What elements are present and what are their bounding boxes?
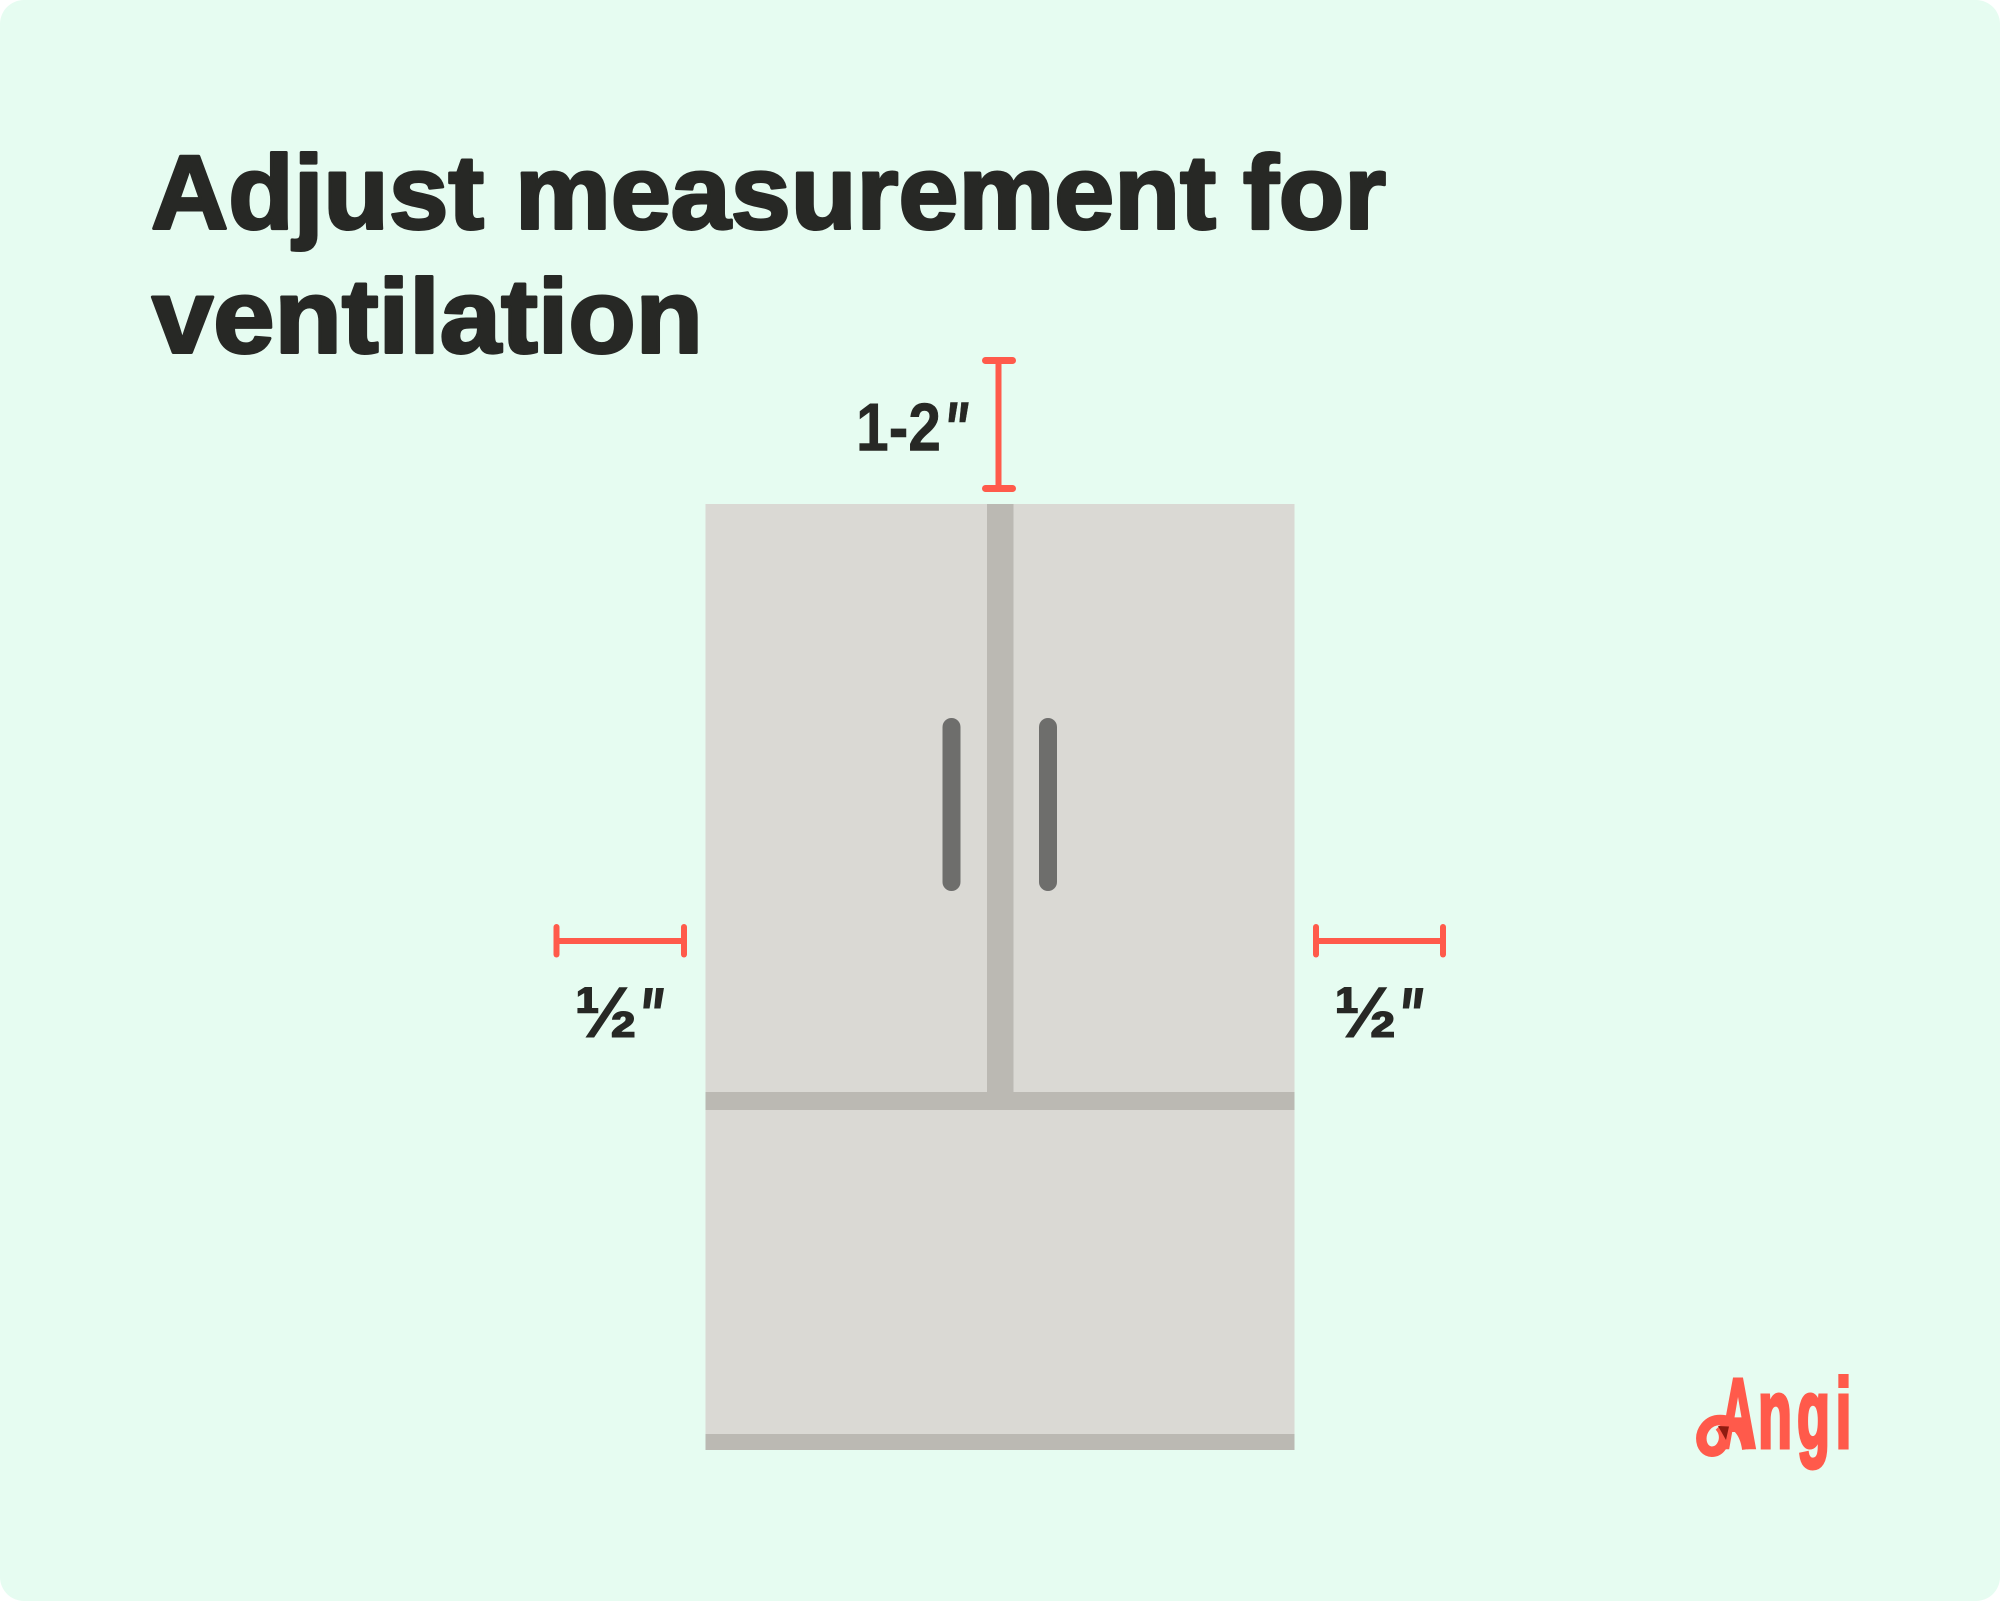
- left clearance bracket: [554, 924, 687, 958]
- center door seam: [987, 504, 1014, 1092]
- left clearance label: ": [638, 971, 664, 1059]
- top clearance bracket: [982, 357, 1016, 492]
- right clearance label: ": [1398, 971, 1423, 1059]
- fridge body: [706, 504, 1294, 1450]
- title: Adjust: [151, 134, 484, 252]
- left clearance label: [574, 971, 664, 1059]
- left door handle: [942, 718, 960, 891]
- right door handle: [1039, 718, 1057, 891]
- top clearance label: 1-2: [856, 390, 941, 466]
- title: for: [1243, 134, 1386, 252]
- Angi logo: [1701, 1358, 1852, 1468]
- logo wordmark: g: [1797, 1358, 1830, 1468]
- right clearance label: ½: [1334, 974, 1397, 1053]
- logo wordmark: i: [1836, 1358, 1852, 1468]
- title: ventilation: [152, 258, 703, 376]
- title: [151, 134, 1386, 376]
- logo wordmark: A: [1720, 1358, 1756, 1468]
- bottom kick plate: [706, 1434, 1294, 1450]
- right clearance bracket: [1313, 924, 1446, 958]
- right clearance label: [1334, 971, 1423, 1059]
- logo wordmark: [1720, 1358, 1852, 1468]
- logo loop shadow: [1718, 1426, 1729, 1440]
- title: measurement: [515, 134, 1216, 252]
- refrigerator: [706, 504, 1294, 1450]
- freezer divider band: [706, 1092, 1294, 1110]
- left clearance label: ½: [574, 974, 638, 1053]
- logo loop: [1701, 1420, 1747, 1452]
- logo wordmark: n: [1758, 1358, 1792, 1468]
- top clearance label: ": [943, 385, 969, 473]
